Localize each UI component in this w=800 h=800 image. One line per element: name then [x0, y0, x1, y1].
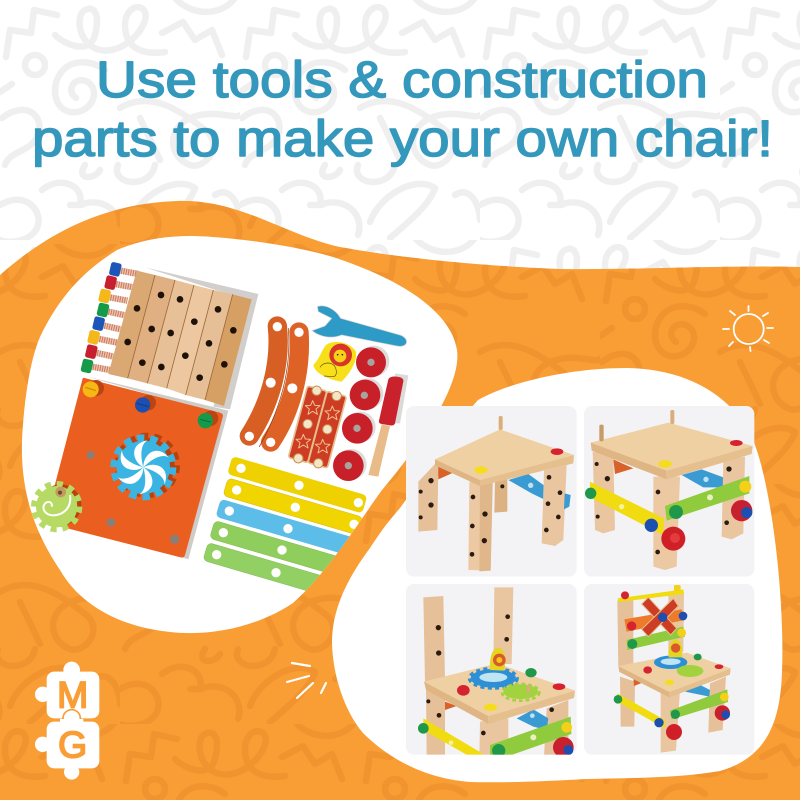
- title: parts to make your own chair!: [32, 110, 773, 167]
- title: [32, 51, 773, 167]
- screws row: [80, 262, 138, 374]
- photo: stool without bars: [406, 406, 577, 577]
- icon: blue wrench: [312, 306, 407, 346]
- red washers: [333, 346, 389, 481]
- panel: left white blob with construction parts: [22, 236, 457, 633]
- red star strips: [288, 386, 346, 468]
- title: Use tools & construction: [96, 51, 708, 108]
- logo: MG puzzle pieces: M: [57, 673, 88, 715]
- logo: MG puzzle pieces: G: [58, 723, 87, 765]
- icon: blue spiral gear: [114, 436, 177, 498]
- coloured planks: [203, 456, 367, 600]
- panel: orange wave background: [0, 201, 800, 800]
- photo: finished chair: [584, 584, 754, 755]
- photo: stool with bars: [584, 406, 754, 577]
- icon: sun: [723, 306, 773, 351]
- logo: MG puzzle pieces: [35, 662, 99, 780]
- icon: lion tag: [313, 342, 356, 382]
- small parts: [203, 322, 367, 600]
- wooden seat board with screws: [80, 262, 258, 409]
- icon: green spiral gear: [34, 484, 81, 529]
- planks: [108, 271, 252, 406]
- panel: right white blob with chair photos: [332, 368, 782, 782]
- orange base board with gears: [34, 376, 228, 559]
- curved orange bars: [245, 322, 304, 447]
- tools group: [312, 306, 408, 481]
- photo: chair with back posts and gears: [406, 584, 577, 758]
- mallet: [368, 373, 408, 477]
- coloured screws on board: [83, 380, 218, 428]
- icon: sparkle rays: [287, 663, 326, 698]
